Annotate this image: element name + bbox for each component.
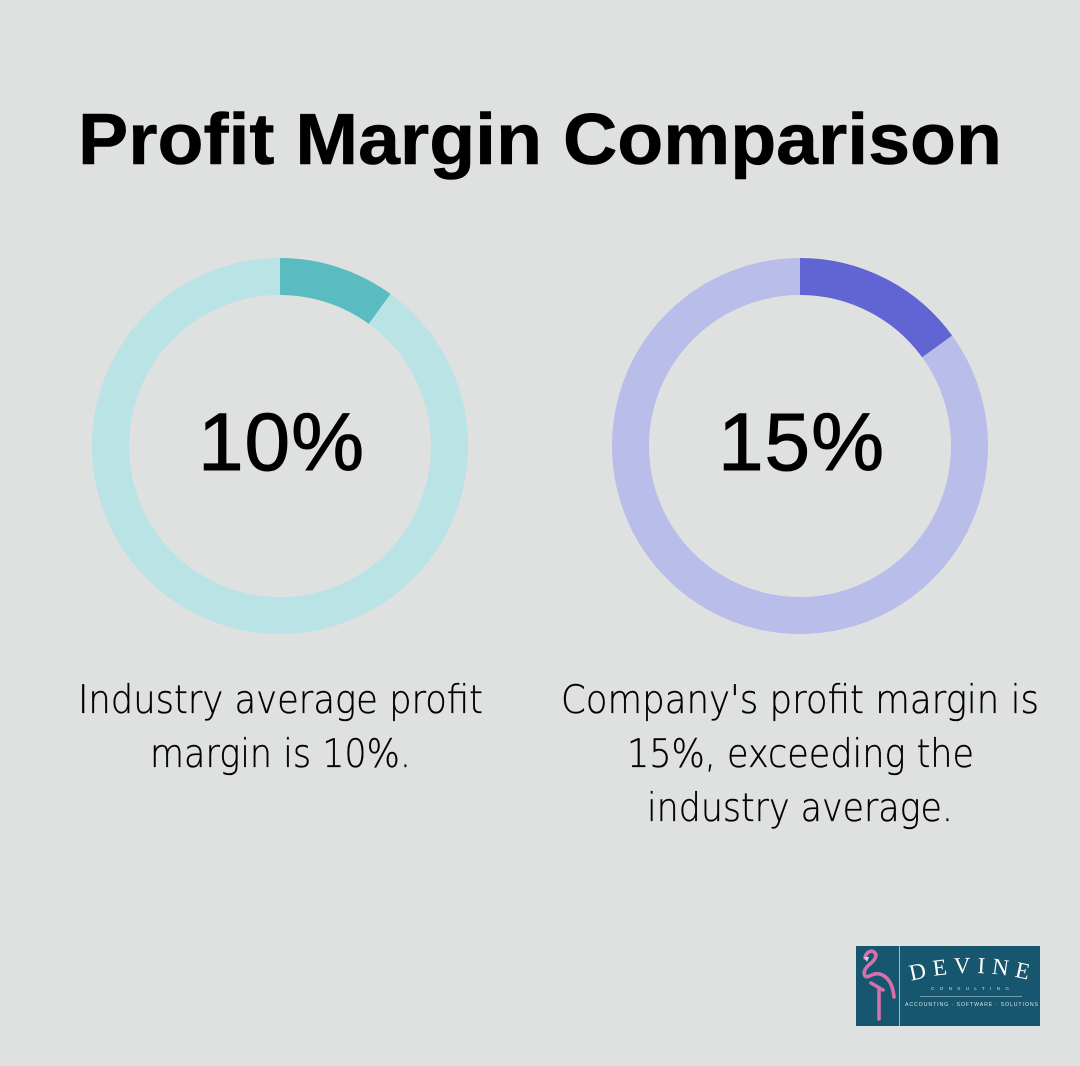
tagline: ACCOUNTING · SOFTWARE · SOLUTIONS — [905, 1002, 1039, 1008]
description: industry: Industry average profit — [78, 678, 483, 723]
title: Profit Margin Comparison — [78, 100, 1002, 180]
description: company: 15%, exceeding the — [627, 732, 974, 777]
logo: Devine Consulting: DEVINE — [908, 958, 1029, 981]
logo: Devine Consulting — [856, 946, 1040, 1026]
panel: industry average — [78, 276, 495, 777]
value: 10%: 10% — [198, 397, 364, 488]
donut chart: 10% — [110, 276, 450, 616]
value: 15%: 15% — [718, 397, 884, 488]
description: company: industry average. — [647, 786, 953, 831]
subtitle: CONSULTING — [931, 986, 1009, 992]
description: industry: margin is 10%. — [150, 732, 411, 777]
panel: company — [561, 276, 1051, 831]
description: company: Company's profit margin is — [561, 678, 1039, 723]
donut chart: 15% — [630, 276, 970, 616]
icon: flamingo — [864, 951, 894, 1019]
